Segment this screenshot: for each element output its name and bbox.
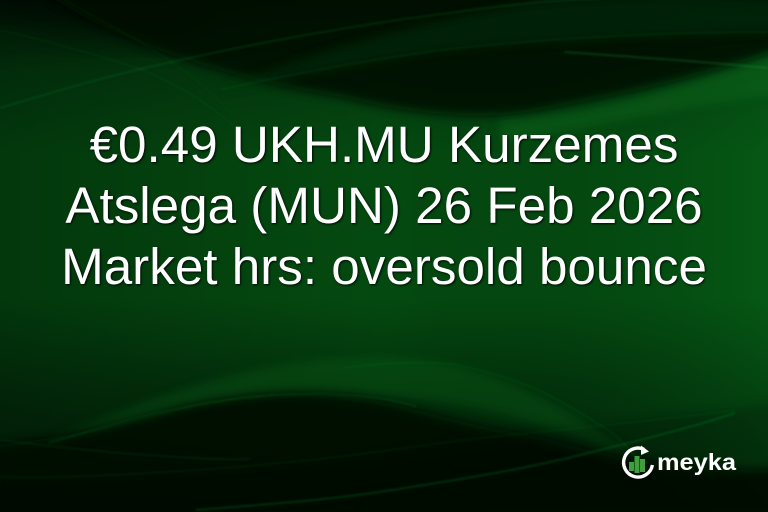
bottom dark hill (0, 394, 768, 512)
top-left corner shade (0, 0, 200, 40)
bright band upper right (500, 55, 768, 142)
title: €0.49 UKH.MU Kurzemes (90, 116, 678, 173)
title (61, 116, 707, 295)
top dark valley (40, 0, 768, 115)
logo: meyka (622, 446, 736, 479)
wordmark: meyka (657, 449, 736, 475)
title: Atslega (MUN) 26 Feb 2026 (65, 177, 703, 234)
title: Market hrs: oversold bounce (61, 238, 707, 295)
bottom wave glow (40, 357, 640, 460)
icon: ring with green bars (624, 446, 652, 477)
